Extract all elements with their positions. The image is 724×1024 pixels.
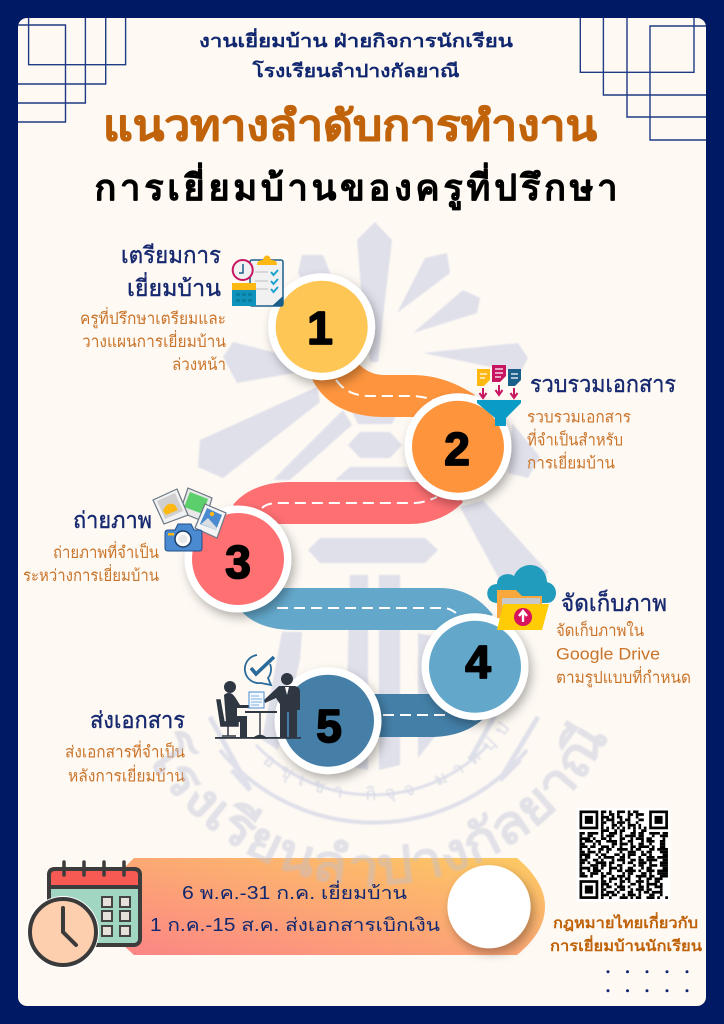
body: step 1 (80, 307, 226, 374)
step 4 circle: 4 (465, 636, 491, 688)
icon: calendar (49, 862, 140, 945)
road 4 to 5 (360, 694, 482, 737)
body: step 2: การเยี่ยมบ้าน (527, 452, 615, 472)
body: step 5: ส่งเอกสารที่จำเป็น (65, 740, 185, 762)
body: step 1: วางแผนการเยี่ยมบ้าน (82, 330, 226, 351)
body: step 3: ระหว่างการเยี่ยมบ้าน (23, 564, 159, 585)
road 3 to 4 (242, 588, 493, 630)
body: step 3: ถ่ายภาพที่จำเป็น (53, 541, 159, 562)
heading: step 2: รวบรวมเอกสาร (530, 371, 676, 397)
icon: clock (27, 896, 99, 968)
step 5 circle: 5 (316, 700, 342, 752)
step 2 circle (404, 393, 512, 500)
header: school: โรงเรียนลำปางกัลยาณี (251, 60, 460, 81)
QR caption: กฎหมายไทยเกี่ยวกับ (553, 912, 698, 932)
body: step 2: ที่จำเป็นสำหรับ (527, 428, 623, 450)
body: step 1: ล่วงหน้า (172, 356, 226, 374)
QR caption: การเยี่ยมบ้านนักเรียน (550, 935, 703, 955)
subtitle: การเยี่ยมบ้านของครูที่ปรึกษา (94, 162, 618, 211)
title: แนวทางลำดับการทำงาน (103, 102, 597, 149)
body: step 4 (556, 620, 691, 688)
road 2 to 3 (233, 482, 463, 524)
icon: clipboard with clock and calendar (232, 256, 283, 306)
step 1 circle: 1 (307, 302, 333, 354)
step 3 circle (184, 506, 292, 612)
heading: step 5: ส่งเอกสาร (90, 707, 185, 733)
step 2 circle: 2 (444, 423, 470, 475)
header: department: งานเยี่ยมบ้าน ฝ่ายกิจการนักเรียน (199, 28, 514, 51)
body: step 2: รวบรวมเอกสาร (527, 408, 631, 426)
icon: documents into funnel (477, 365, 521, 426)
heading: step 1: เตรียมการ (121, 242, 221, 268)
icon: two people at desk with check bubble (215, 655, 301, 739)
watermark: school seal (198, 222, 548, 825)
body: step 1: ครูที่ปรึกษาเตรียมและ (80, 307, 226, 329)
watermark: school name ring: โรงเรียนลำปางกัลยาณี (153, 720, 608, 888)
decorative corner squares: top right (580, 18, 706, 140)
body: step 4: จัดเก็บภาพใน (556, 620, 644, 640)
step 5 circle (274, 667, 382, 774)
body: step 5: หลังการเยี่ยมบ้าน (68, 764, 185, 786)
step 4 circle (422, 613, 528, 720)
body: step 3 (23, 541, 159, 585)
body: step 4: Google Drive (556, 646, 660, 664)
step 1 circle (268, 273, 375, 380)
dot grid (606, 970, 688, 992)
watermark motto: อชุเชา กิจฺจ มาหปฺป (264, 721, 510, 802)
icon: cloud folder upload (487, 565, 556, 630)
QR code (577, 808, 671, 902)
step 3 circle: 3 (225, 536, 251, 588)
decorative corner squares: top left (18, 18, 126, 122)
date banner (122, 858, 545, 955)
heading: step 1 line 2: เยี่ยมบ้าน (127, 272, 221, 301)
QR caption (550, 912, 703, 955)
road 1 to 2 (312, 360, 475, 417)
icon: photos and camera (153, 488, 226, 551)
heading: step 3: ถ่ายภาพ (73, 507, 152, 533)
body: step 5 (65, 740, 185, 786)
banner text: home visit dates: 6 พ.ค.-31 ก.ค. เยี่ยมบ้าน (182, 880, 407, 903)
body: step 4: ตามรูปแบบที่กำหนด (556, 666, 691, 688)
heading: step 4: จัดเก็บภาพ (561, 588, 667, 616)
body: step 2 (527, 408, 631, 472)
banner text: document dates: 1 ก.ค.-15 ส.ค. ส่งเอกสารเบิกเงิน (150, 915, 440, 935)
